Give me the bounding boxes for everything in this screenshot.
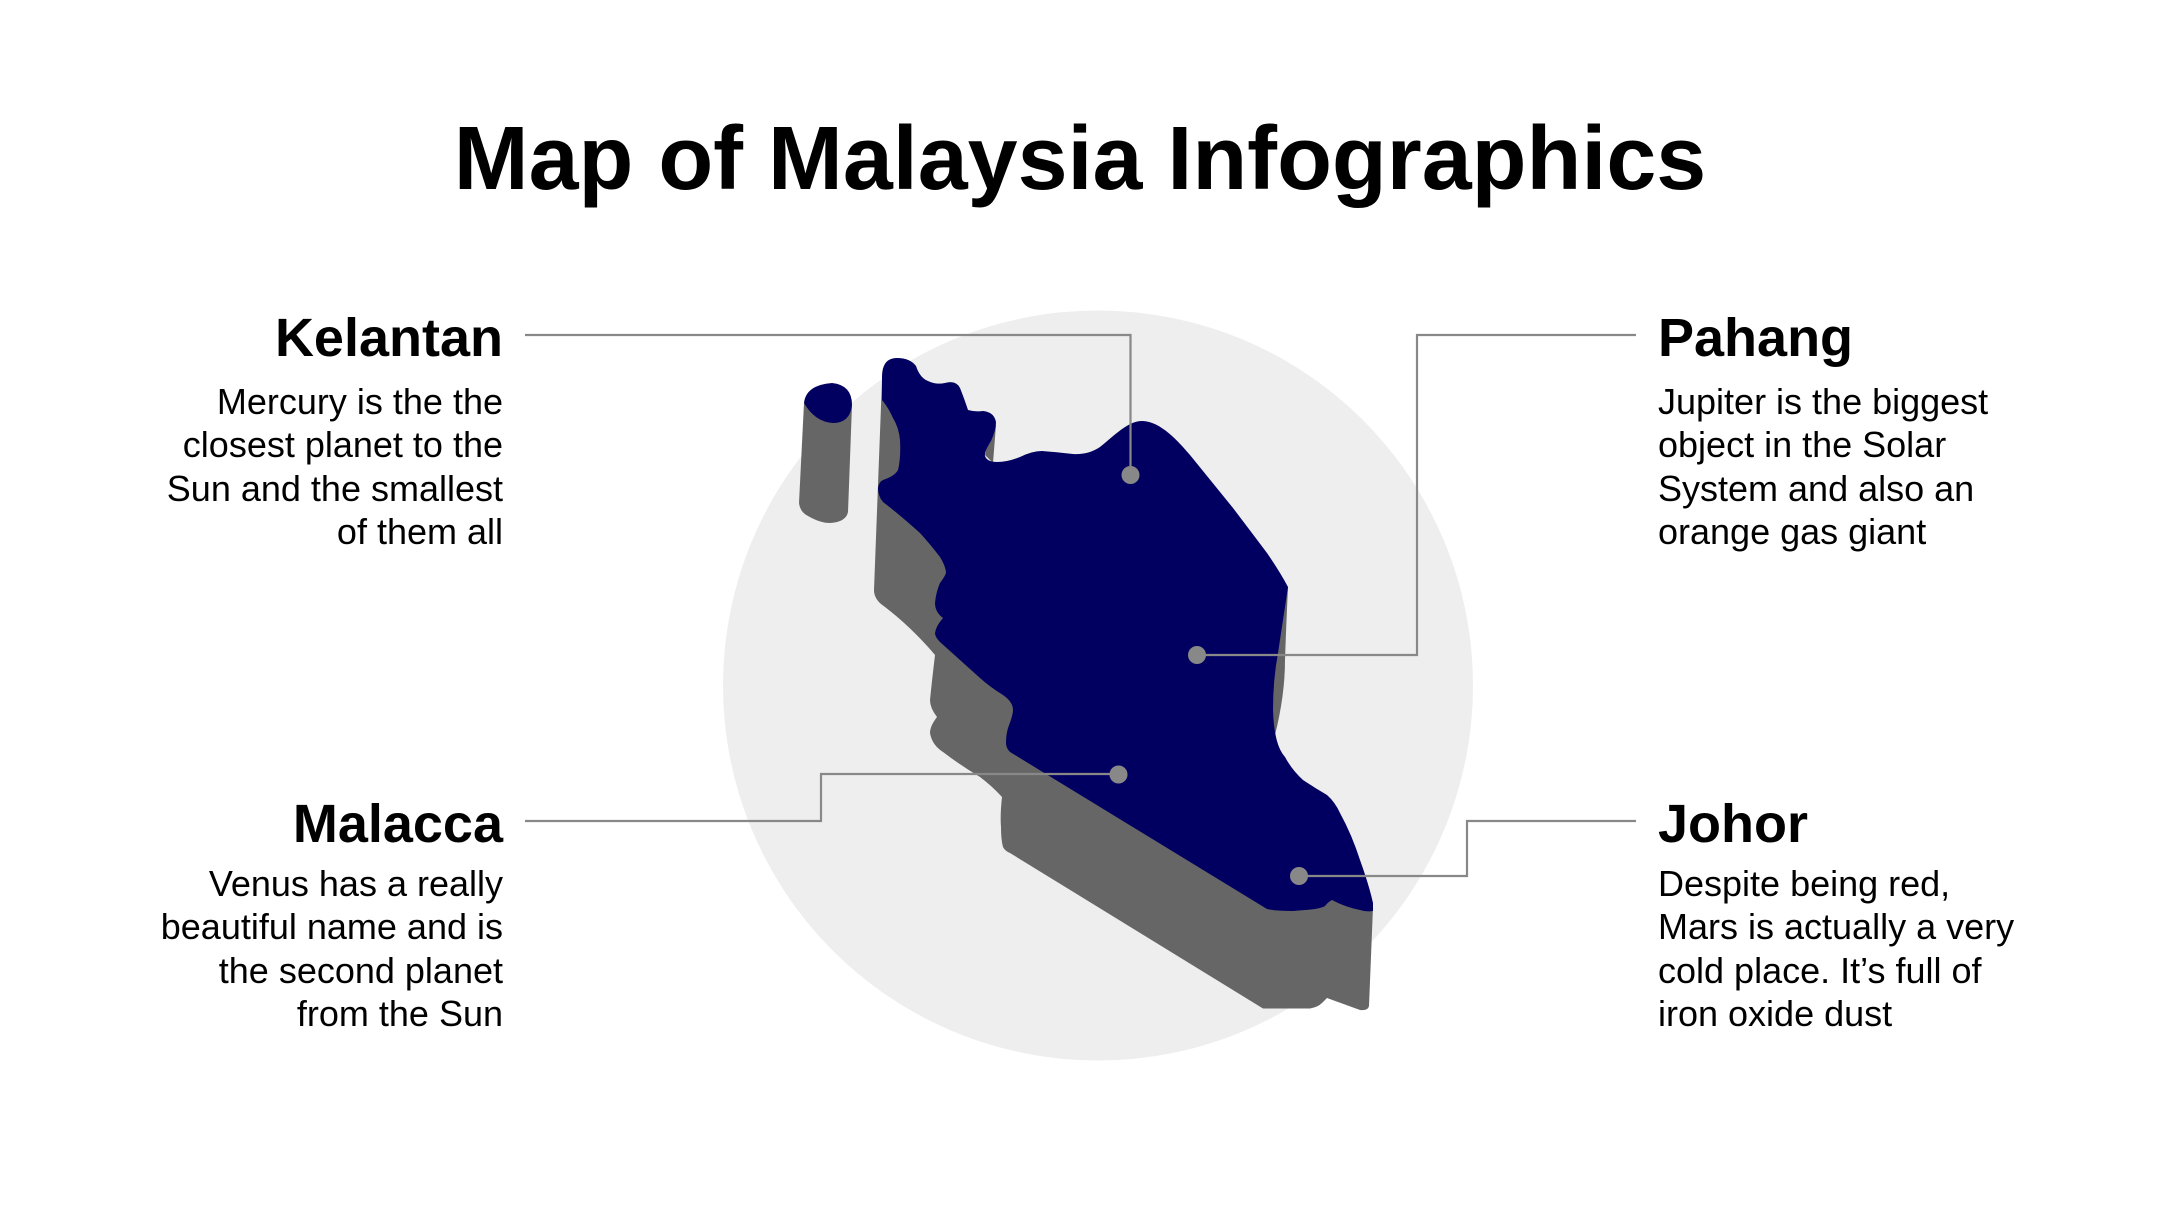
peninsula extruded shadow bbox=[874, 380, 1373, 1010]
text block: Pahang: object in the Solar bbox=[1658, 424, 1946, 465]
text block: Johor: Johor bbox=[1658, 794, 1808, 854]
text block: Kelantan: Kelantan bbox=[275, 308, 503, 368]
text block: Kelantan: Mercury is the the bbox=[217, 381, 503, 422]
text block: Pahang: System and also an bbox=[1658, 468, 1974, 509]
text block: Pahang bbox=[1658, 308, 1988, 552]
connector: Kelantan bbox=[525, 335, 1140, 484]
text block: Johor bbox=[1658, 794, 2014, 1034]
peninsula top bbox=[878, 358, 1373, 911]
title: Map of Malaysia Infographics bbox=[454, 109, 1706, 209]
text block: Kelantan: Sun and the smallest bbox=[167, 468, 503, 509]
text block: Johor: Despite being red, bbox=[1658, 863, 1950, 904]
text block: Pahang: orange gas giant bbox=[1658, 511, 1926, 552]
text block: Malacca: Malacca bbox=[293, 794, 503, 854]
connector: Johor bbox=[1290, 821, 1636, 885]
text block: Malacca: Venus has a really bbox=[209, 863, 503, 904]
text block: Malacca: from the Sun bbox=[297, 993, 503, 1034]
text block: Malacca bbox=[161, 794, 504, 1034]
text block: Kelantan: closest planet to the bbox=[183, 424, 503, 465]
text block: Kelantan bbox=[167, 308, 503, 552]
connector: Pahang bbox=[1188, 335, 1636, 664]
text block: Malacca: beautiful name and is bbox=[161, 906, 503, 947]
text block: Johor: iron oxide dust bbox=[1658, 993, 1892, 1034]
island top bbox=[804, 383, 852, 423]
background circle bbox=[723, 310, 1473, 1060]
connector: Malacca bbox=[525, 766, 1128, 821]
island extruded shadow bbox=[799, 403, 852, 523]
text block: Kelantan: of them all bbox=[337, 511, 503, 552]
text block: Johor: cold place. It’s full of bbox=[1658, 950, 1982, 991]
text block: Pahang: Jupiter is the biggest bbox=[1658, 381, 1988, 422]
text block: Malacca: the second planet bbox=[219, 950, 503, 991]
text block: Pahang: Pahang bbox=[1658, 308, 1853, 368]
text block: Johor: Mars is actually a very bbox=[1658, 906, 2014, 947]
